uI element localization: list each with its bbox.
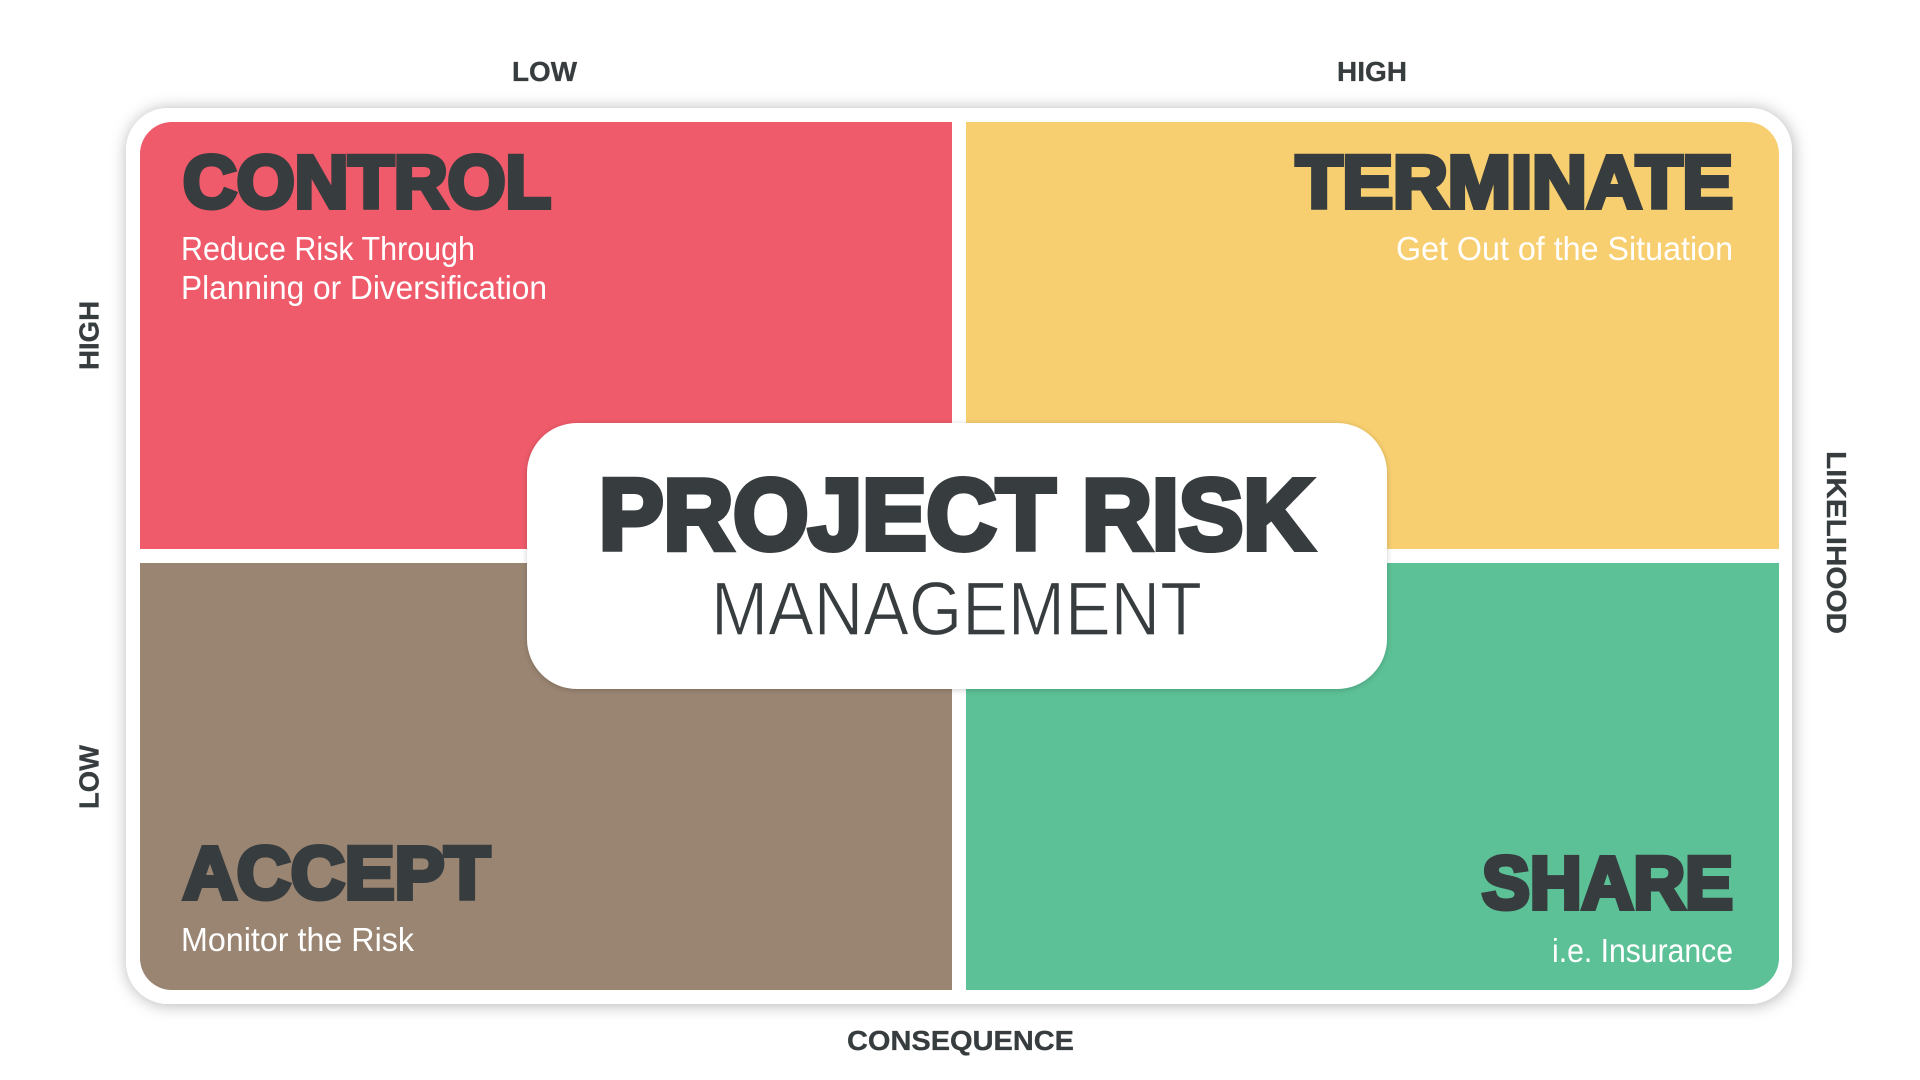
heading: share: SHARE: [1482, 842, 1733, 924]
title: project risk: PROJECT RISK: [599, 459, 1313, 571]
panel: accept: [140, 563, 952, 990]
panel: terminate: [966, 122, 1779, 549]
description: control: [181, 230, 547, 306]
heading: accept: ACCEPT: [183, 832, 490, 914]
title backing: [527, 423, 1387, 689]
description: terminate: Get Out of the Situation: [1396, 230, 1733, 267]
panel: share: [966, 563, 1779, 990]
axis label: likelihood: LIKELIHOOD: [1821, 451, 1852, 634]
description: accept: Monitor the Risk: [181, 921, 414, 958]
axis label: left low: LOW: [74, 744, 104, 809]
axis label: consequence: CONSEQUENCE: [847, 1025, 1074, 1056]
axis label: top low: LOW: [512, 56, 578, 87]
axis label: left high: HIGH: [74, 301, 104, 370]
quadrant background: red: [140, 122, 952, 549]
heading: terminate: TERMINATE: [1296, 140, 1733, 224]
description: control: Planning or Diversification: [181, 269, 547, 306]
description: share: i.e. Insurance: [1552, 932, 1733, 969]
axis label: top high: HIGH: [1337, 56, 1407, 87]
heading: control: CONTROL: [183, 140, 551, 224]
matrix card: [126, 108, 1792, 1004]
subtitle: management: MANAGEMENT: [711, 567, 1202, 652]
center title box: [527, 423, 1387, 689]
quadrant background: yellow: [966, 122, 1779, 549]
panel: control: [140, 122, 952, 549]
quadrant background: brown: [140, 563, 952, 990]
description: control: Reduce Risk Through: [181, 230, 475, 267]
quadrant background: green: [966, 563, 1779, 990]
